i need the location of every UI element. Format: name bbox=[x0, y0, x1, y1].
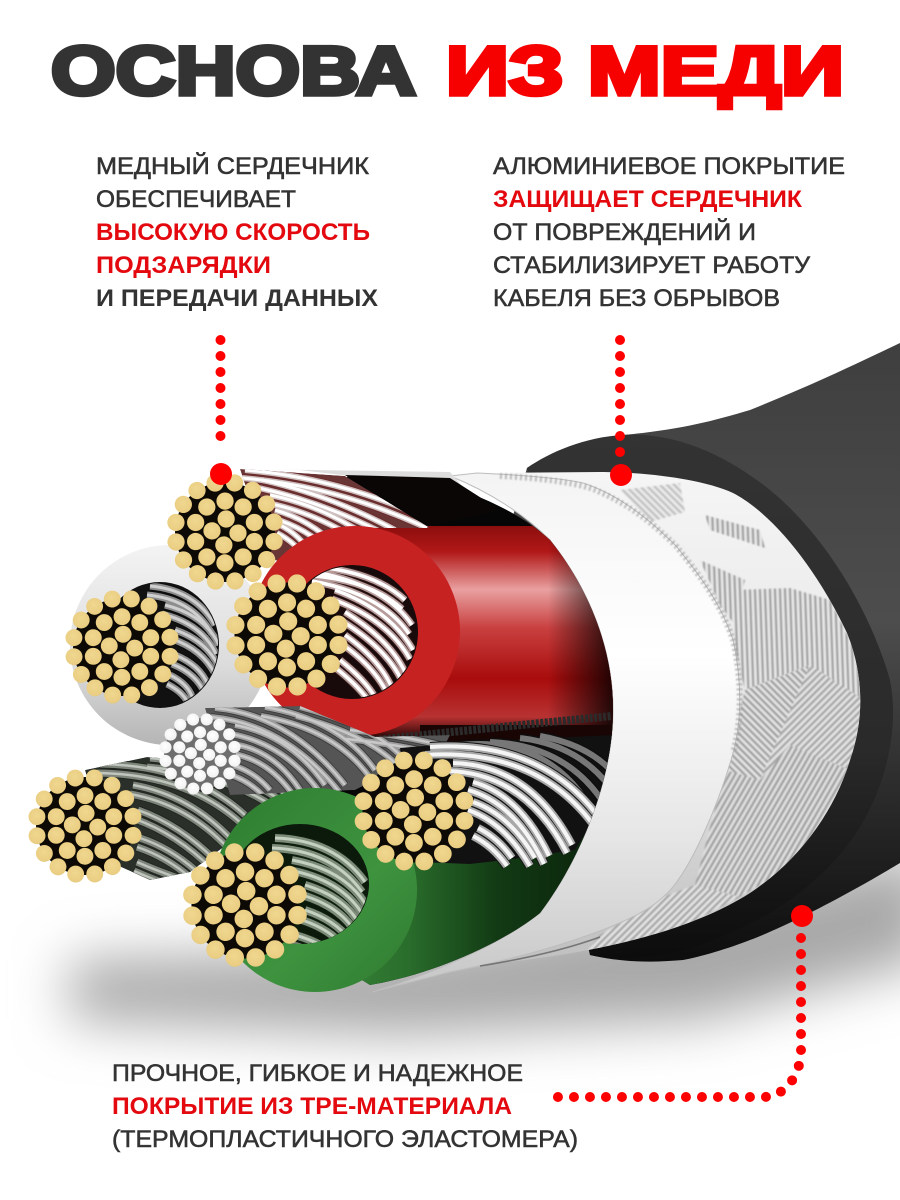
interior tubes bbox=[362, 526, 613, 985]
red wire insulation bbox=[250, 526, 460, 736]
wire strands: lower left bbox=[85, 757, 285, 886]
pointer: TPE coating bbox=[554, 905, 813, 1097]
silver bundle bbox=[152, 706, 248, 802]
title: ОСНОВА bbox=[51, 32, 416, 110]
title: ИЗ МЕДИ bbox=[446, 32, 844, 110]
text block: TPE coating: (ТЕРМОПЛАСТИЧНОГО ЭЛАСТОМЕРА) bbox=[112, 1126, 578, 1153]
wire strands: right conductor bbox=[400, 735, 615, 866]
wire strands: white conductor bbox=[205, 706, 450, 799]
text block: copper core: И ПЕРЕДАЧИ ДАННЫХ bbox=[96, 285, 378, 312]
white shielding band bbox=[372, 473, 740, 992]
hole interior bbox=[300, 472, 613, 985]
text block: TPE coating: ПОКРЫТИЕ ИЗ ТРЕ-МАТЕРИАЛА bbox=[112, 1093, 512, 1120]
woven texture patches bbox=[580, 483, 864, 960]
white wire insulation bbox=[70, 545, 270, 745]
copper bundle top bbox=[156, 463, 294, 601]
green wire insulation bbox=[213, 788, 417, 992]
woven sheath bbox=[495, 472, 860, 962]
strands in red wire bbox=[312, 566, 416, 698]
text block: TPE coating: ПРОЧНОЕ, ГИБКОЕ И НАДЕЖНОЕ bbox=[112, 1060, 523, 1087]
copper bundle left bbox=[55, 580, 189, 714]
text block: copper core: МЕДНЫЙ СЕРДЕЧНИК bbox=[96, 152, 369, 180]
braid line bbox=[330, 716, 612, 745]
text block: TPE coating bbox=[112, 1060, 578, 1153]
outer black cable bbox=[500, 343, 900, 962]
text block: aluminium coating: СТАБИЛИЗИРУЕТ РАБОТУ bbox=[493, 252, 811, 279]
strands in green wire bbox=[272, 834, 368, 944]
text block: aluminium coating: КАБЕЛЯ БЕЗ ОБРЫВОВ bbox=[493, 285, 780, 312]
band crease bbox=[480, 937, 600, 966]
band edge hatch bbox=[500, 476, 740, 753]
floor shadow bbox=[70, 850, 900, 1035]
pointer: aluminium coating bbox=[610, 340, 632, 486]
title bbox=[51, 32, 844, 110]
copper bundle lower left bbox=[18, 759, 152, 893]
text block: copper core bbox=[96, 152, 378, 312]
copper bundle right bbox=[343, 740, 485, 882]
cable illustration bbox=[18, 343, 900, 1000]
text block: copper core: ПОДЗАРЯДКИ bbox=[96, 252, 271, 279]
strands in white wire bbox=[147, 586, 219, 709]
copper bundle green wire bbox=[171, 831, 319, 979]
dark collar ring bbox=[527, 435, 893, 958]
text block: aluminium coating: ЗАЩИЩАЕТ СЕРДЕЧНИК bbox=[493, 186, 802, 213]
pointer: copper core bbox=[210, 340, 232, 485]
text block: copper core: ОБЕСПЕЧИВАЕТ bbox=[96, 186, 296, 213]
text block: aluminium coating: ОТ ПОВРЕЖДЕНИЙ И bbox=[493, 218, 756, 246]
text block: aluminium coating bbox=[493, 153, 845, 312]
wire strands: upper bbox=[240, 469, 500, 563]
text block: aluminium coating: АЛЮМИНИЕВОЕ ПОКРЫТИЕ bbox=[493, 153, 845, 180]
copper bundle centre bbox=[215, 563, 359, 707]
text block: copper core: ВЫСОКУЮ СКОРОСТЬ bbox=[96, 219, 370, 246]
